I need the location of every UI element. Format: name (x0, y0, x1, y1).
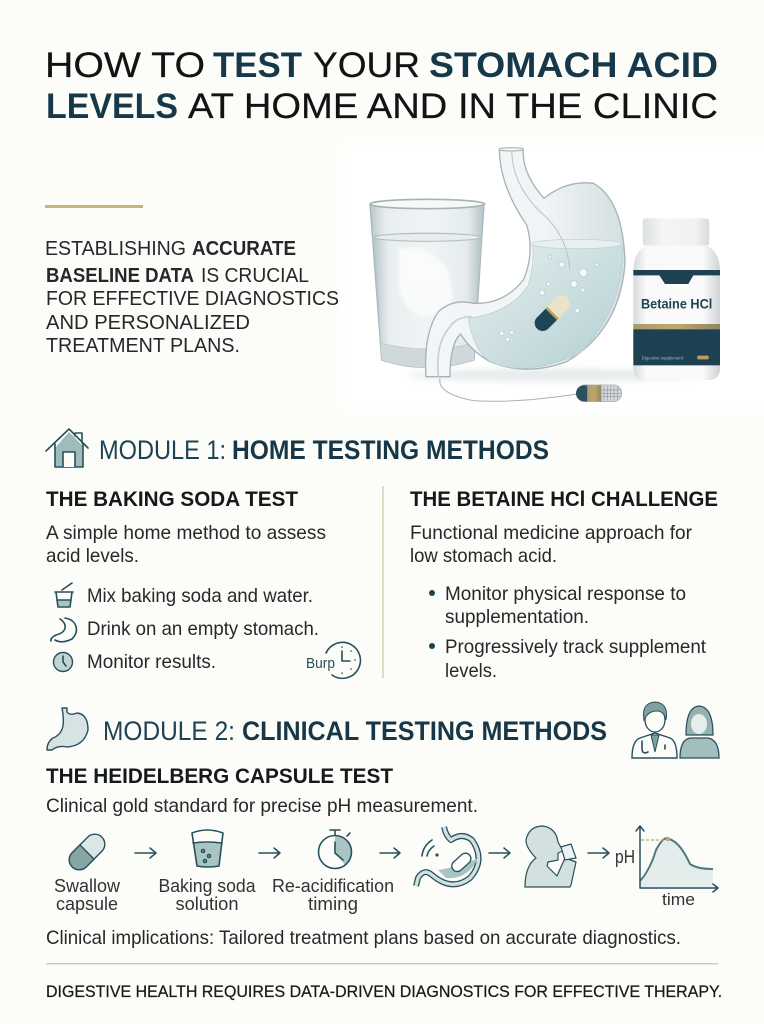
step labels: Baking soda (158, 876, 256, 896)
supplement bottle: Digestive supplement (642, 355, 684, 360)
intro text: FOR EFFECTIVE DIAGNOSTICS (46, 288, 339, 310)
module 1 heading (46, 429, 549, 467)
icon: person drinking (525, 826, 576, 887)
module 2 heading: MODULE 2: (103, 716, 235, 746)
title (45, 46, 718, 126)
title: AT HOME AND IN THE CLINIC (188, 87, 718, 126)
icon: burp clock: Burp (306, 656, 335, 672)
panel: betaine challenge (410, 487, 718, 682)
glass of baking soda water (370, 199, 485, 367)
panel: baking soda test: Mix baking soda and water. (87, 585, 313, 607)
icon: capsule in stomach (416, 827, 479, 886)
intro text: AND PERSONALIZED (46, 312, 250, 334)
supplement bottle: Betaine HCl (641, 296, 712, 311)
doctor (632, 702, 677, 758)
wire and capsule (440, 378, 622, 402)
step labels: timing (308, 894, 358, 914)
icon: small stomach (51, 618, 76, 642)
intro text: IS CRUCIAL (201, 265, 309, 287)
module 1 heading: HOME TESTING METHODS (232, 435, 549, 465)
arrow (588, 848, 609, 858)
title: HOW TO (45, 46, 205, 85)
panel: baking soda test: Drink on an empty stomach. (87, 618, 319, 640)
panel: betaine challenge: supplementation. (445, 606, 589, 628)
intro text: ACCURATE (192, 238, 296, 260)
intro accent line (45, 205, 143, 208)
patient (680, 706, 719, 758)
chart: pH over time (615, 826, 718, 909)
panel: baking soda test (46, 487, 360, 678)
icon: doctor and patient (632, 702, 719, 758)
module 2 heading: CLINICAL TESTING METHODS (242, 716, 607, 746)
module 2 heading (47, 708, 607, 750)
icon: stomach (47, 708, 88, 750)
step labels: solution (176, 894, 238, 914)
panel: betaine challenge: Progressively track supplement (445, 636, 707, 658)
panel: heidelberg capsule test (46, 764, 718, 914)
panel: betaine challenge: THE BETAINE HCl CHALLENGE (410, 487, 718, 511)
hero illustration (340, 142, 764, 414)
supplement bottle (633, 218, 720, 380)
clinical implications: Clinical implications: Tailored treatment plans based on accurate diagnostics. (46, 927, 681, 949)
title: YOUR (313, 46, 420, 85)
step labels: Swallow (54, 876, 121, 896)
icon: stopwatch (318, 830, 352, 868)
icon: house (46, 429, 88, 467)
step labels (54, 876, 394, 914)
transparent stomach (426, 148, 625, 377)
icon: burp clock (306, 642, 360, 678)
panel: heidelberg capsule test: THE HEIDELBERG CAPSULE TEST (46, 764, 393, 788)
footer rule (46, 963, 718, 964)
icon: cup of solution (192, 830, 223, 867)
step labels: Re-acidification (272, 876, 394, 896)
arrow (259, 848, 280, 858)
pill (531, 292, 573, 334)
footer statement: DIGESTIVE HEALTH REQUIRES DATA-DRIVEN DIAGNOSTICS FOR EFFECTIVE THERAPY. (46, 982, 722, 1001)
intro text: TREATMENT PLANS. (46, 335, 240, 357)
intro text: BASELINE DATA (46, 265, 194, 287)
intro text: ESTABLISHING (45, 238, 186, 260)
panel: betaine challenge: levels. (445, 660, 497, 682)
panel: baking soda test: acid levels. (46, 545, 139, 567)
panel: heidelberg capsule test: Clinical gold standard for precise pH measurement. (46, 795, 478, 817)
panel: baking soda test: Monitor results. (87, 651, 216, 673)
panel: baking soda test: A simple home method to assess (46, 522, 326, 544)
module 1 heading: MODULE 1: (99, 435, 226, 465)
panel: baking soda test: THE BAKING SODA TEST (46, 487, 298, 511)
icon: capsule (65, 830, 109, 874)
chart: pH over time: time (662, 890, 695, 909)
panel: betaine challenge: low stomach acid. (410, 545, 557, 567)
chart: pH over time: pH (615, 847, 635, 867)
step labels: capsule (56, 894, 118, 914)
icon: cup with spoon (55, 583, 73, 607)
arrow (489, 848, 510, 858)
column divider (382, 486, 384, 678)
title: LEVELS (46, 87, 178, 126)
intro text (45, 238, 339, 357)
panel: betaine challenge: Monitor physical response to (445, 583, 686, 605)
arrow (135, 848, 156, 858)
title: TEST (213, 46, 302, 85)
title: STOMACH ACID (429, 46, 718, 85)
icon: small clock (54, 652, 72, 672)
panel: betaine challenge: Functional medicine approach for (410, 522, 692, 544)
arrow (380, 848, 400, 858)
